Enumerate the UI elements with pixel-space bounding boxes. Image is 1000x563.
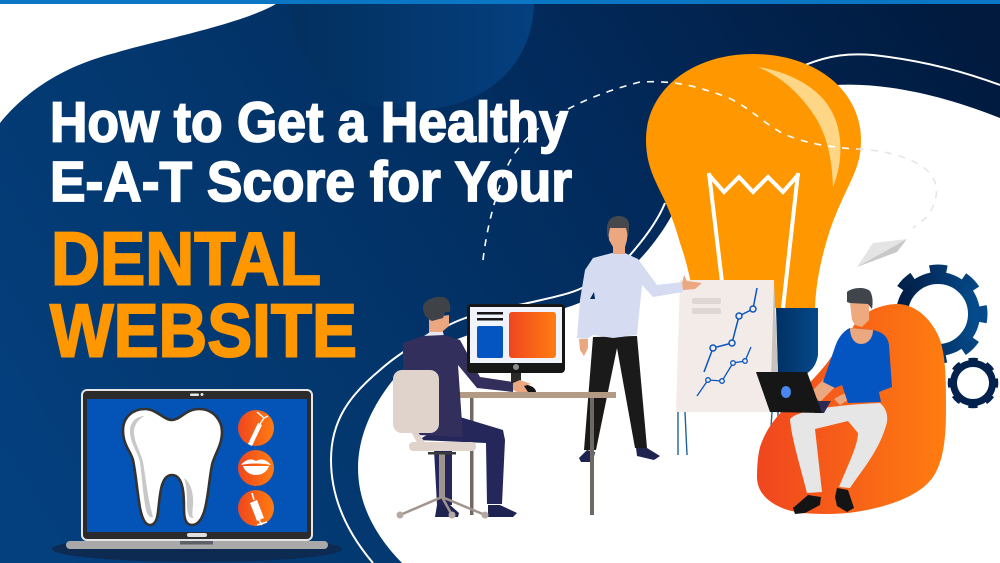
title line 4: WEBSITE — [50, 289, 357, 373]
desk — [459, 392, 616, 515]
bulb filament — [709, 173, 798, 308]
icon: large gear — [893, 269, 983, 359]
line chart upper — [704, 288, 757, 372]
bulb base — [776, 308, 818, 374]
laptop notch — [180, 541, 213, 544]
title — [50, 90, 572, 373]
neckline — [850, 328, 873, 344]
screen blue panel — [477, 326, 503, 358]
chair seat — [409, 442, 476, 451]
chair bracket — [428, 452, 456, 454]
chart board — [676, 280, 774, 412]
laptop base — [66, 541, 328, 549]
hair — [423, 297, 450, 321]
laptop shadow — [52, 536, 342, 562]
shoes — [579, 448, 660, 462]
suit jacket — [403, 335, 513, 437]
orange bean bag — [757, 304, 946, 514]
collar — [424, 332, 444, 336]
monitor frame — [467, 304, 565, 373]
icon: tooth — [123, 409, 222, 525]
chair base — [400, 497, 485, 515]
head — [850, 303, 869, 327]
laptop lid — [82, 390, 312, 540]
icon: light bulb — [646, 54, 861, 374]
blue shirt — [823, 328, 892, 403]
chair back — [393, 370, 439, 433]
chart side — [768, 280, 778, 412]
desk front leg — [590, 398, 594, 515]
screen text lines — [477, 312, 503, 320]
monitor stand — [511, 372, 521, 383]
title line 2: E-A-T Score for Your — [50, 150, 572, 214]
background: lighter circle — [290, 4, 534, 110]
icon: gears — [893, 269, 996, 406]
icon: paper airplane — [857, 239, 907, 267]
screen orange panel — [509, 312, 556, 358]
computer monitor — [467, 304, 565, 383]
bulb glass — [646, 54, 861, 308]
laptop with tooth — [52, 390, 342, 562]
trousers — [790, 403, 887, 493]
hair — [607, 216, 629, 238]
chair post — [439, 453, 445, 498]
title line 3: DENTAL — [51, 217, 321, 301]
arm gap — [590, 292, 595, 299]
hands — [579, 275, 702, 356]
shoes — [793, 488, 854, 514]
person on bean bag — [756, 288, 892, 514]
shoes — [435, 505, 517, 517]
seated man at monitor — [393, 297, 517, 518]
chair — [393, 370, 488, 518]
laptop hinge — [187, 533, 207, 537]
thighs and front leg — [418, 417, 505, 504]
laptop — [756, 372, 831, 413]
back desk leg — [470, 398, 474, 515]
trousers — [584, 336, 647, 450]
chart labels — [692, 298, 721, 314]
laptop screen — [87, 399, 307, 532]
chair connector — [411, 432, 426, 444]
back leg — [434, 450, 452, 505]
forearms — [811, 378, 878, 405]
top blue bar — [0, 0, 1000, 4]
line chart lower — [697, 347, 751, 396]
icon: syringe — [238, 490, 274, 526]
mouse and hand — [513, 380, 536, 392]
desk top — [459, 392, 616, 398]
bulb highlight — [758, 67, 840, 187]
monitor button — [513, 364, 519, 370]
presenter standing — [577, 216, 702, 462]
icon: smile — [238, 450, 274, 486]
chart legs — [678, 412, 778, 455]
title line 1: How to Get a Healthy — [50, 90, 568, 154]
neck — [429, 315, 449, 336]
icon: dental tool — [238, 410, 274, 446]
white curved line — [331, 54, 1000, 563]
hair — [847, 288, 873, 309]
dashed flight path — [483, 82, 936, 260]
chair wheels — [396, 512, 488, 518]
icon: small gear — [950, 360, 996, 406]
flip chart — [676, 280, 778, 455]
tooth shading — [130, 416, 195, 518]
monitor screen — [470, 307, 562, 363]
head and neck — [608, 228, 628, 254]
shirt — [577, 253, 683, 339]
laptop camera — [190, 393, 204, 396]
